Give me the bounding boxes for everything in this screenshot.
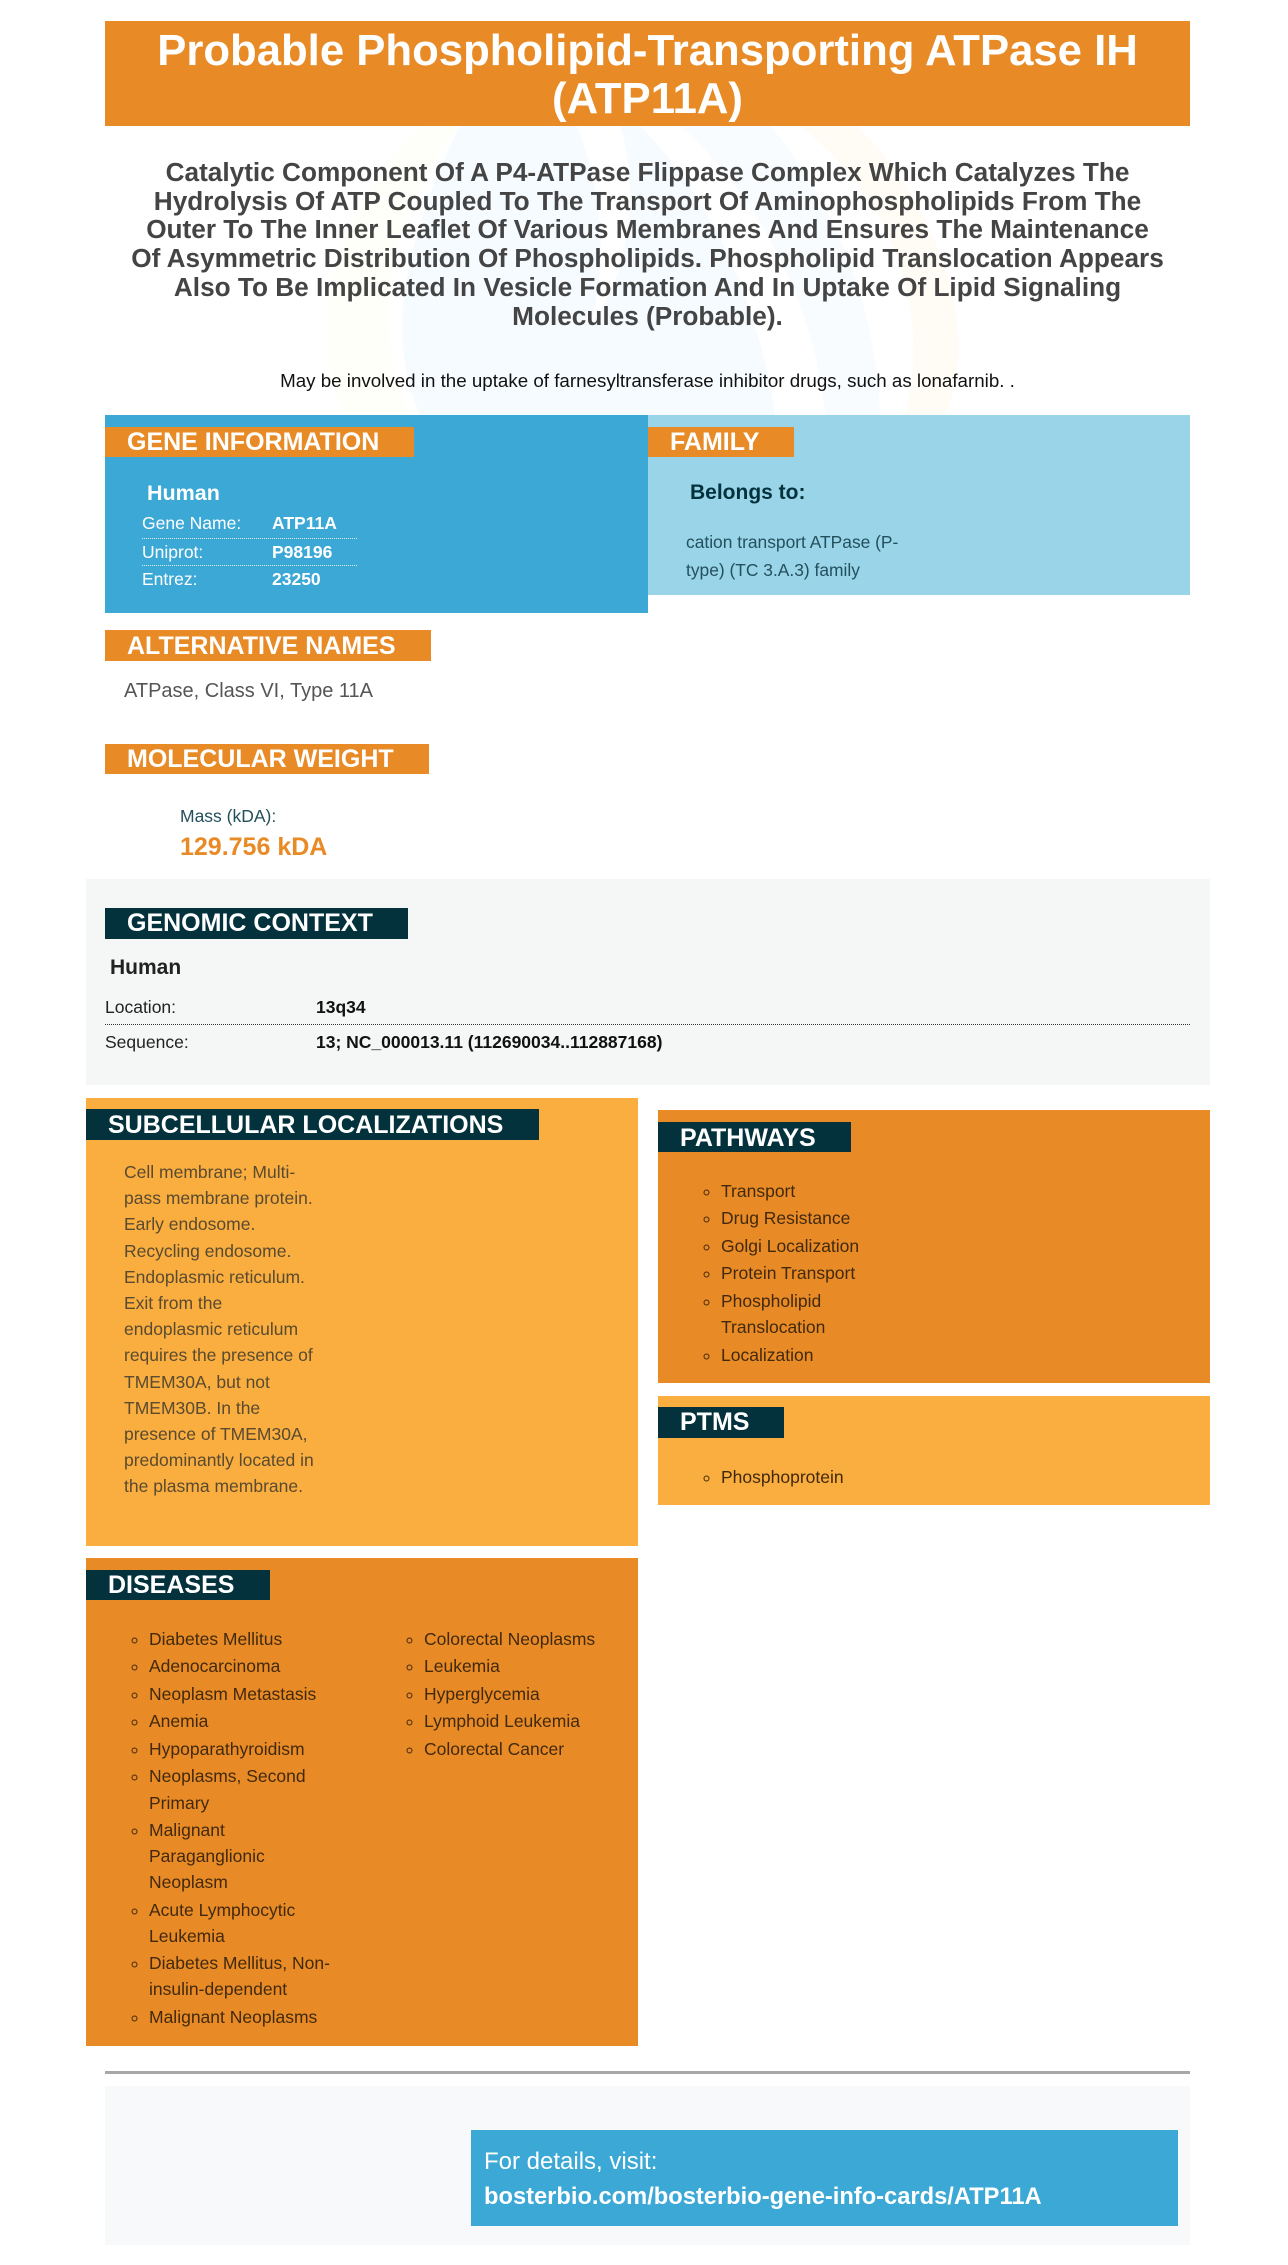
uniprot row bbox=[142, 539, 357, 566]
family text: type) (TC 3.A.3) family bbox=[686, 560, 860, 580]
diseases list column 2: Lymphoid Leukemia bbox=[424, 1711, 580, 1731]
pathways list: Golgi Localization bbox=[721, 1236, 859, 1256]
background logo watermark bbox=[402, 126, 958, 415]
diseases list column 1: Adenocarcinoma bbox=[149, 1656, 280, 1676]
diseases list column 2: Colorectal Neoplasms bbox=[424, 1629, 595, 1649]
panel: family bbox=[648, 415, 1190, 595]
localization text: TMEM30B. In the bbox=[124, 1398, 260, 1418]
alternative names text: ATPase, Class VI, Type 11A bbox=[124, 680, 373, 702]
gene name row bbox=[142, 511, 357, 539]
subtitle: catalytic description: Outer To The Inner Leaflet Of Various Membranes And Ensures The Maintenance bbox=[146, 214, 1149, 244]
heading: ptms: PTMS bbox=[680, 1408, 749, 1436]
localization text: Early endosome. bbox=[124, 1214, 255, 1234]
footer divider bbox=[105, 2071, 1190, 2074]
diseases list column 1 bbox=[132, 1629, 330, 2027]
diseases list column 2: Hyperglycemia bbox=[424, 1684, 540, 1704]
diseases list column 2 bbox=[406, 1629, 595, 1759]
heading: gene information: GENE INFORMATION bbox=[127, 428, 379, 456]
localization text: presence of TMEM30A, bbox=[124, 1424, 308, 1444]
diseases list column 1: Hypoparathyroidism bbox=[149, 1739, 305, 1759]
uniprot row: P98196 bbox=[272, 542, 332, 562]
family text: cation transport ATPase (P- bbox=[686, 532, 898, 552]
belongs to label: Belongs to: bbox=[690, 481, 806, 504]
heading: pathways bbox=[658, 1122, 851, 1152]
panel: footer bbox=[105, 2086, 1190, 2245]
localization text bbox=[124, 1162, 314, 1496]
diseases list column 1: Anemia bbox=[149, 1711, 208, 1731]
pathways list bbox=[704, 1181, 859, 1365]
title: (ATP11A) bbox=[552, 74, 743, 123]
sequence row: 13; NC_000013.11 (112690034..112887168) bbox=[316, 1032, 662, 1052]
localization text: Cell membrane; Multi- bbox=[124, 1162, 295, 1182]
pathways list: Protein Transport bbox=[721, 1263, 855, 1283]
subtitle: catalytic description: Catalytic Component Of A P4-ATPase Flippase Complex Which Catalyzes The bbox=[166, 157, 1129, 187]
panel: pathways bbox=[658, 1110, 1210, 1383]
sequence row bbox=[105, 1032, 662, 1052]
heading: alternative names: ALTERNATIVE NAMES bbox=[127, 632, 396, 660]
pathways list: Drug Resistance bbox=[721, 1208, 850, 1228]
diseases list column 1: insulin-dependent bbox=[149, 1979, 287, 1999]
localization text: requires the presence of bbox=[124, 1345, 313, 1365]
diseases list column 1: Paraganglionic bbox=[149, 1846, 265, 1866]
details url: bosterbio.com/bosterbio-gene-info-cards/ATP11A bbox=[484, 2184, 1042, 2210]
panel: genomic context bbox=[86, 879, 1210, 1085]
localization text: Exit from the bbox=[124, 1293, 222, 1313]
location row bbox=[105, 995, 1190, 1025]
diseases list column 1: Leukemia bbox=[149, 1926, 225, 1946]
localization text: endoplasmic reticulum bbox=[124, 1319, 298, 1339]
panel: gene information bbox=[105, 415, 648, 613]
gene name row: ATP11A bbox=[272, 513, 337, 533]
subtitle: catalytic description: Molecules (Probable). bbox=[512, 301, 783, 331]
species label: Human bbox=[147, 481, 220, 505]
localization text: TMEM30A, but not bbox=[124, 1372, 270, 1392]
localization text: Recycling endosome. bbox=[124, 1241, 291, 1261]
diseases list column 1: Acute Lymphocytic bbox=[149, 1900, 295, 1920]
entrez row bbox=[142, 569, 321, 589]
subtitle: catalytic description: Of Asymmetric Distribution Of Phospholipids. Phospholipid Translocation Appears bbox=[131, 243, 1164, 273]
localization text: pass membrane protein. bbox=[124, 1188, 313, 1208]
gene name row: Gene Name: bbox=[142, 513, 241, 533]
diseases list column 2: Colorectal Cancer bbox=[424, 1739, 564, 1759]
diseases list column 1: Neoplasm bbox=[149, 1872, 228, 1892]
localization text: Endoplasmic reticulum. bbox=[124, 1267, 305, 1287]
diseases list column 1: Malignant Neoplasms bbox=[149, 2007, 317, 2027]
subtitle: catalytic description: Also To Be Implicated In Vesicle Formation And In Uptake Of Lipid Signaling bbox=[174, 272, 1121, 302]
entrez row: Entrez: bbox=[142, 569, 197, 589]
title: Probable Phospholipid-Transporting ATPase IH bbox=[157, 26, 1138, 75]
ptms list: Phosphoprotein bbox=[721, 1467, 844, 1487]
subtitle: catalytic description bbox=[131, 157, 1164, 331]
species label: Human bbox=[110, 956, 181, 979]
uniprot row: Uniprot: bbox=[142, 542, 203, 562]
pathways list: Localization bbox=[721, 1345, 813, 1365]
localization text: the plasma membrane. bbox=[124, 1476, 303, 1496]
panel: subcellular localizations bbox=[86, 1098, 638, 1546]
heading: family: FAMILY bbox=[670, 428, 759, 456]
pathways list: Translocation bbox=[721, 1317, 825, 1337]
mass label: Mass (kDA): bbox=[180, 806, 276, 826]
details label: For details, visit: bbox=[484, 2148, 657, 2175]
pathways list: Phospholipid bbox=[721, 1291, 821, 1311]
location row: Location: bbox=[105, 997, 176, 1017]
diseases list column 2: Leukemia bbox=[424, 1656, 500, 1676]
entrez row: 23250 bbox=[272, 569, 321, 589]
heading: genomic context: GENOMIC CONTEXT bbox=[127, 909, 373, 937]
diseases list column 1: Neoplasms, Second bbox=[149, 1766, 306, 1786]
panel: diseases bbox=[86, 1558, 638, 2046]
mass value: 129.756 kDA bbox=[180, 833, 327, 861]
heading: diseases: DISEASES bbox=[108, 1571, 234, 1599]
localization text: predominantly located in bbox=[124, 1450, 314, 1470]
heading: family bbox=[648, 427, 794, 457]
location row: 13q34 bbox=[316, 997, 366, 1017]
pathways list: Transport bbox=[721, 1181, 795, 1201]
heading: molecular weight: MOLECULAR WEIGHT bbox=[127, 745, 394, 773]
diseases list column 1: Diabetes Mellitus bbox=[149, 1629, 282, 1649]
subtitle: catalytic description: Hydrolysis Of ATP Coupled To The Transport Of Aminophospholipids From The bbox=[154, 186, 1141, 216]
heading: diseases bbox=[86, 1570, 270, 1600]
panel: ptms bbox=[658, 1396, 1210, 1505]
diseases list column 1: Malignant bbox=[149, 1820, 225, 1840]
diseases list column 1: Neoplasm Metastasis bbox=[149, 1684, 316, 1704]
family text bbox=[686, 532, 898, 580]
title bbox=[105, 21, 1190, 126]
heading: ptms bbox=[658, 1407, 784, 1438]
note on lonafarnib: May be involved in the uptake of farnesyltransferase inhibitor drugs, such as lonafarnib. . bbox=[280, 370, 1015, 391]
heading: subcellular localizations: SUBCELLULAR LOCALIZATIONS bbox=[108, 1111, 503, 1139]
diseases list column 1: Diabetes Mellitus, Non- bbox=[149, 1953, 330, 1973]
sequence row: Sequence: bbox=[105, 1032, 189, 1052]
heading: pathways: PATHWAYS bbox=[680, 1124, 816, 1152]
diseases list column 1: Primary bbox=[149, 1793, 209, 1813]
callout: details link bbox=[471, 2130, 1178, 2226]
